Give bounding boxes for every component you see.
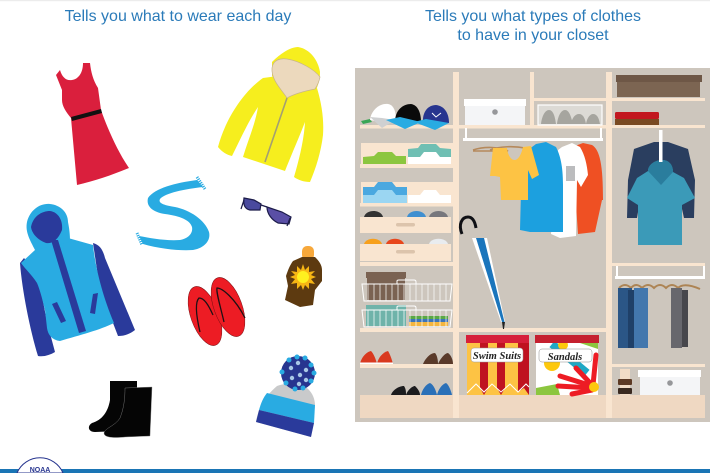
shoes: black pair [391,386,420,395]
icon: striped beanie [256,354,316,437]
orange coat [575,143,603,234]
icon: yellow jacket [218,47,323,182]
hats in upper drawer [364,211,448,217]
icon: red dress [56,63,129,185]
yellow shirt [490,146,539,200]
folded shirts row 1 [363,144,451,164]
title: weather forecast column: Tells you what to wear each day [65,8,291,25]
icon: red flip-flops [181,273,252,350]
folded shirts row 2 [363,182,451,203]
panel: closet [355,68,710,422]
icon: sunglasses [241,198,291,226]
shoes: blue sneakers [421,383,452,395]
label text: Swim Suits [473,351,521,362]
folded red and brown stack [615,112,659,125]
blue puffer vest [520,142,563,232]
lower drawer [360,244,451,261]
wire basket with teal box and folded clothes [362,305,452,327]
grey trousers [671,288,688,348]
clothes rail [463,128,603,141]
title: climate column [425,8,641,44]
umbrella [460,217,505,329]
jeans [618,288,648,348]
icon: sunscreen bottle [285,246,322,307]
caps on shelf [361,104,449,130]
label text: Sandals [548,352,582,363]
box: sandals [535,335,599,395]
shoes: brown pair [423,353,453,364]
trouser rack [615,266,705,279]
logo: NOAA [17,458,63,473]
box: swim suits [466,335,529,395]
hangers on trouser rack [619,285,700,289]
footer bar [0,469,710,473]
upper drawer [360,217,451,233]
title: climate column: Tells you what types of clothes [425,8,641,25]
closet frame: posts and shelves [360,72,705,418]
clear hat box [538,105,602,125]
hats in lower drawer [364,239,448,244]
title: climate column: to have in your closet [457,27,609,44]
white shirt [551,143,588,238]
hangers [473,147,525,151]
icon: blue scarf [137,177,209,250]
white storage box [464,99,526,125]
shirt pocket [566,166,575,181]
hanging rod [659,130,662,162]
wire basket with brown box [362,272,452,301]
belts [618,369,632,395]
closet base drawers [360,395,705,418]
teal shirt [627,160,695,245]
shoes: red sneakers [360,351,393,364]
white box, lower right [638,370,701,395]
brown box [616,75,702,97]
icon: black boots [89,381,152,438]
icon: blue jacket [20,204,135,356]
navy suit jacket [627,142,695,218]
